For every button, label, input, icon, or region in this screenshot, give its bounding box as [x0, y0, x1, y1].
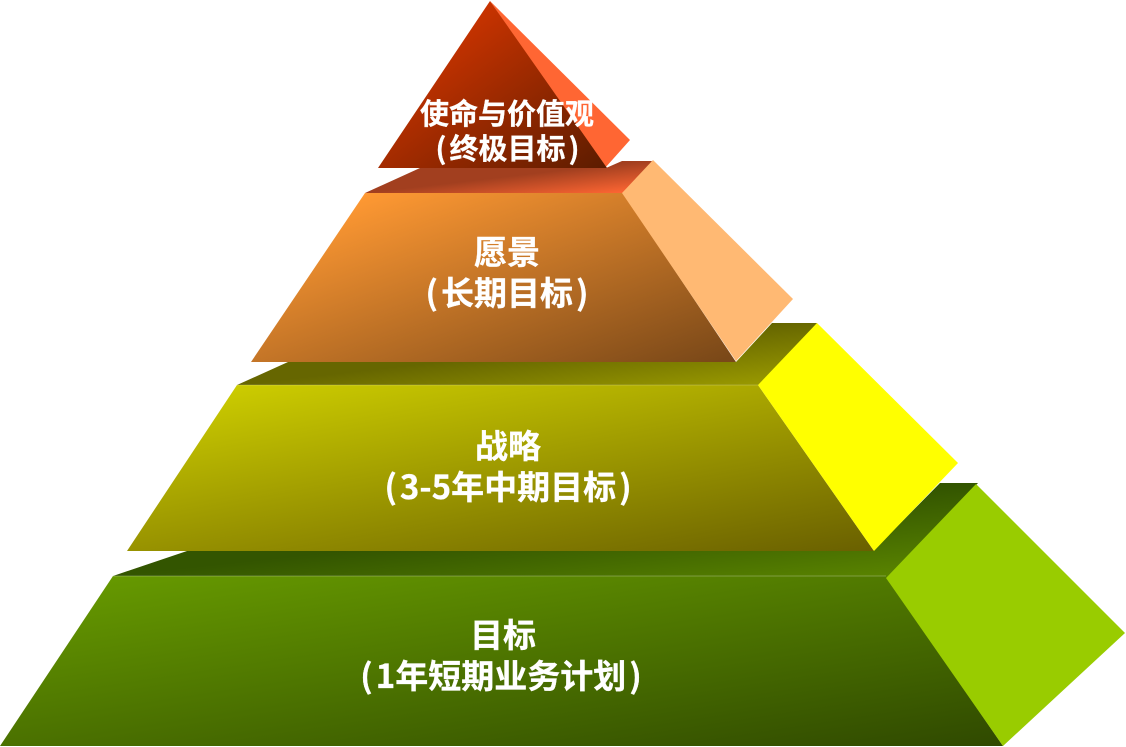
- tier 2: vision: [251, 160, 793, 362]
- label: mission and values: [420, 91, 594, 168]
- label: strategy: [384, 420, 632, 509]
- label: goals: (1年短期业务计划): [360, 650, 642, 698]
- tier 3 top face: [237, 323, 817, 388]
- tier 3: strategy: [127, 323, 958, 551]
- tier 3 front face: [127, 385, 874, 551]
- tier 2 top face: [365, 161, 652, 196]
- tier 4 top face: [113, 483, 978, 580]
- label: goals: [360, 609, 642, 698]
- tier 4 side face: [886, 484, 1125, 746]
- label: strategy: (3-5年中期目标): [384, 461, 632, 509]
- label: vision: (长期目标): [426, 267, 588, 315]
- tier 1: mission and values: [378, 1, 630, 168]
- tier 2 side face: [622, 160, 793, 361]
- label: vision: [426, 226, 588, 315]
- tier 4: goals: [0, 483, 1125, 746]
- tier 1 front face: [378, 1, 607, 168]
- label: vision: 愿景: [474, 226, 540, 274]
- label: strategy: 战略: [475, 420, 541, 468]
- tier 3 side face: [758, 323, 958, 551]
- tier 1 side face: [490, 1, 630, 168]
- label: mission and values: 使命与价值观: [420, 91, 594, 133]
- label: mission and values: (终极目标): [436, 126, 579, 168]
- label: goals: 目标: [470, 609, 536, 657]
- tier 4 front face: [0, 576, 1003, 746]
- tier 2 front face: [251, 193, 736, 362]
